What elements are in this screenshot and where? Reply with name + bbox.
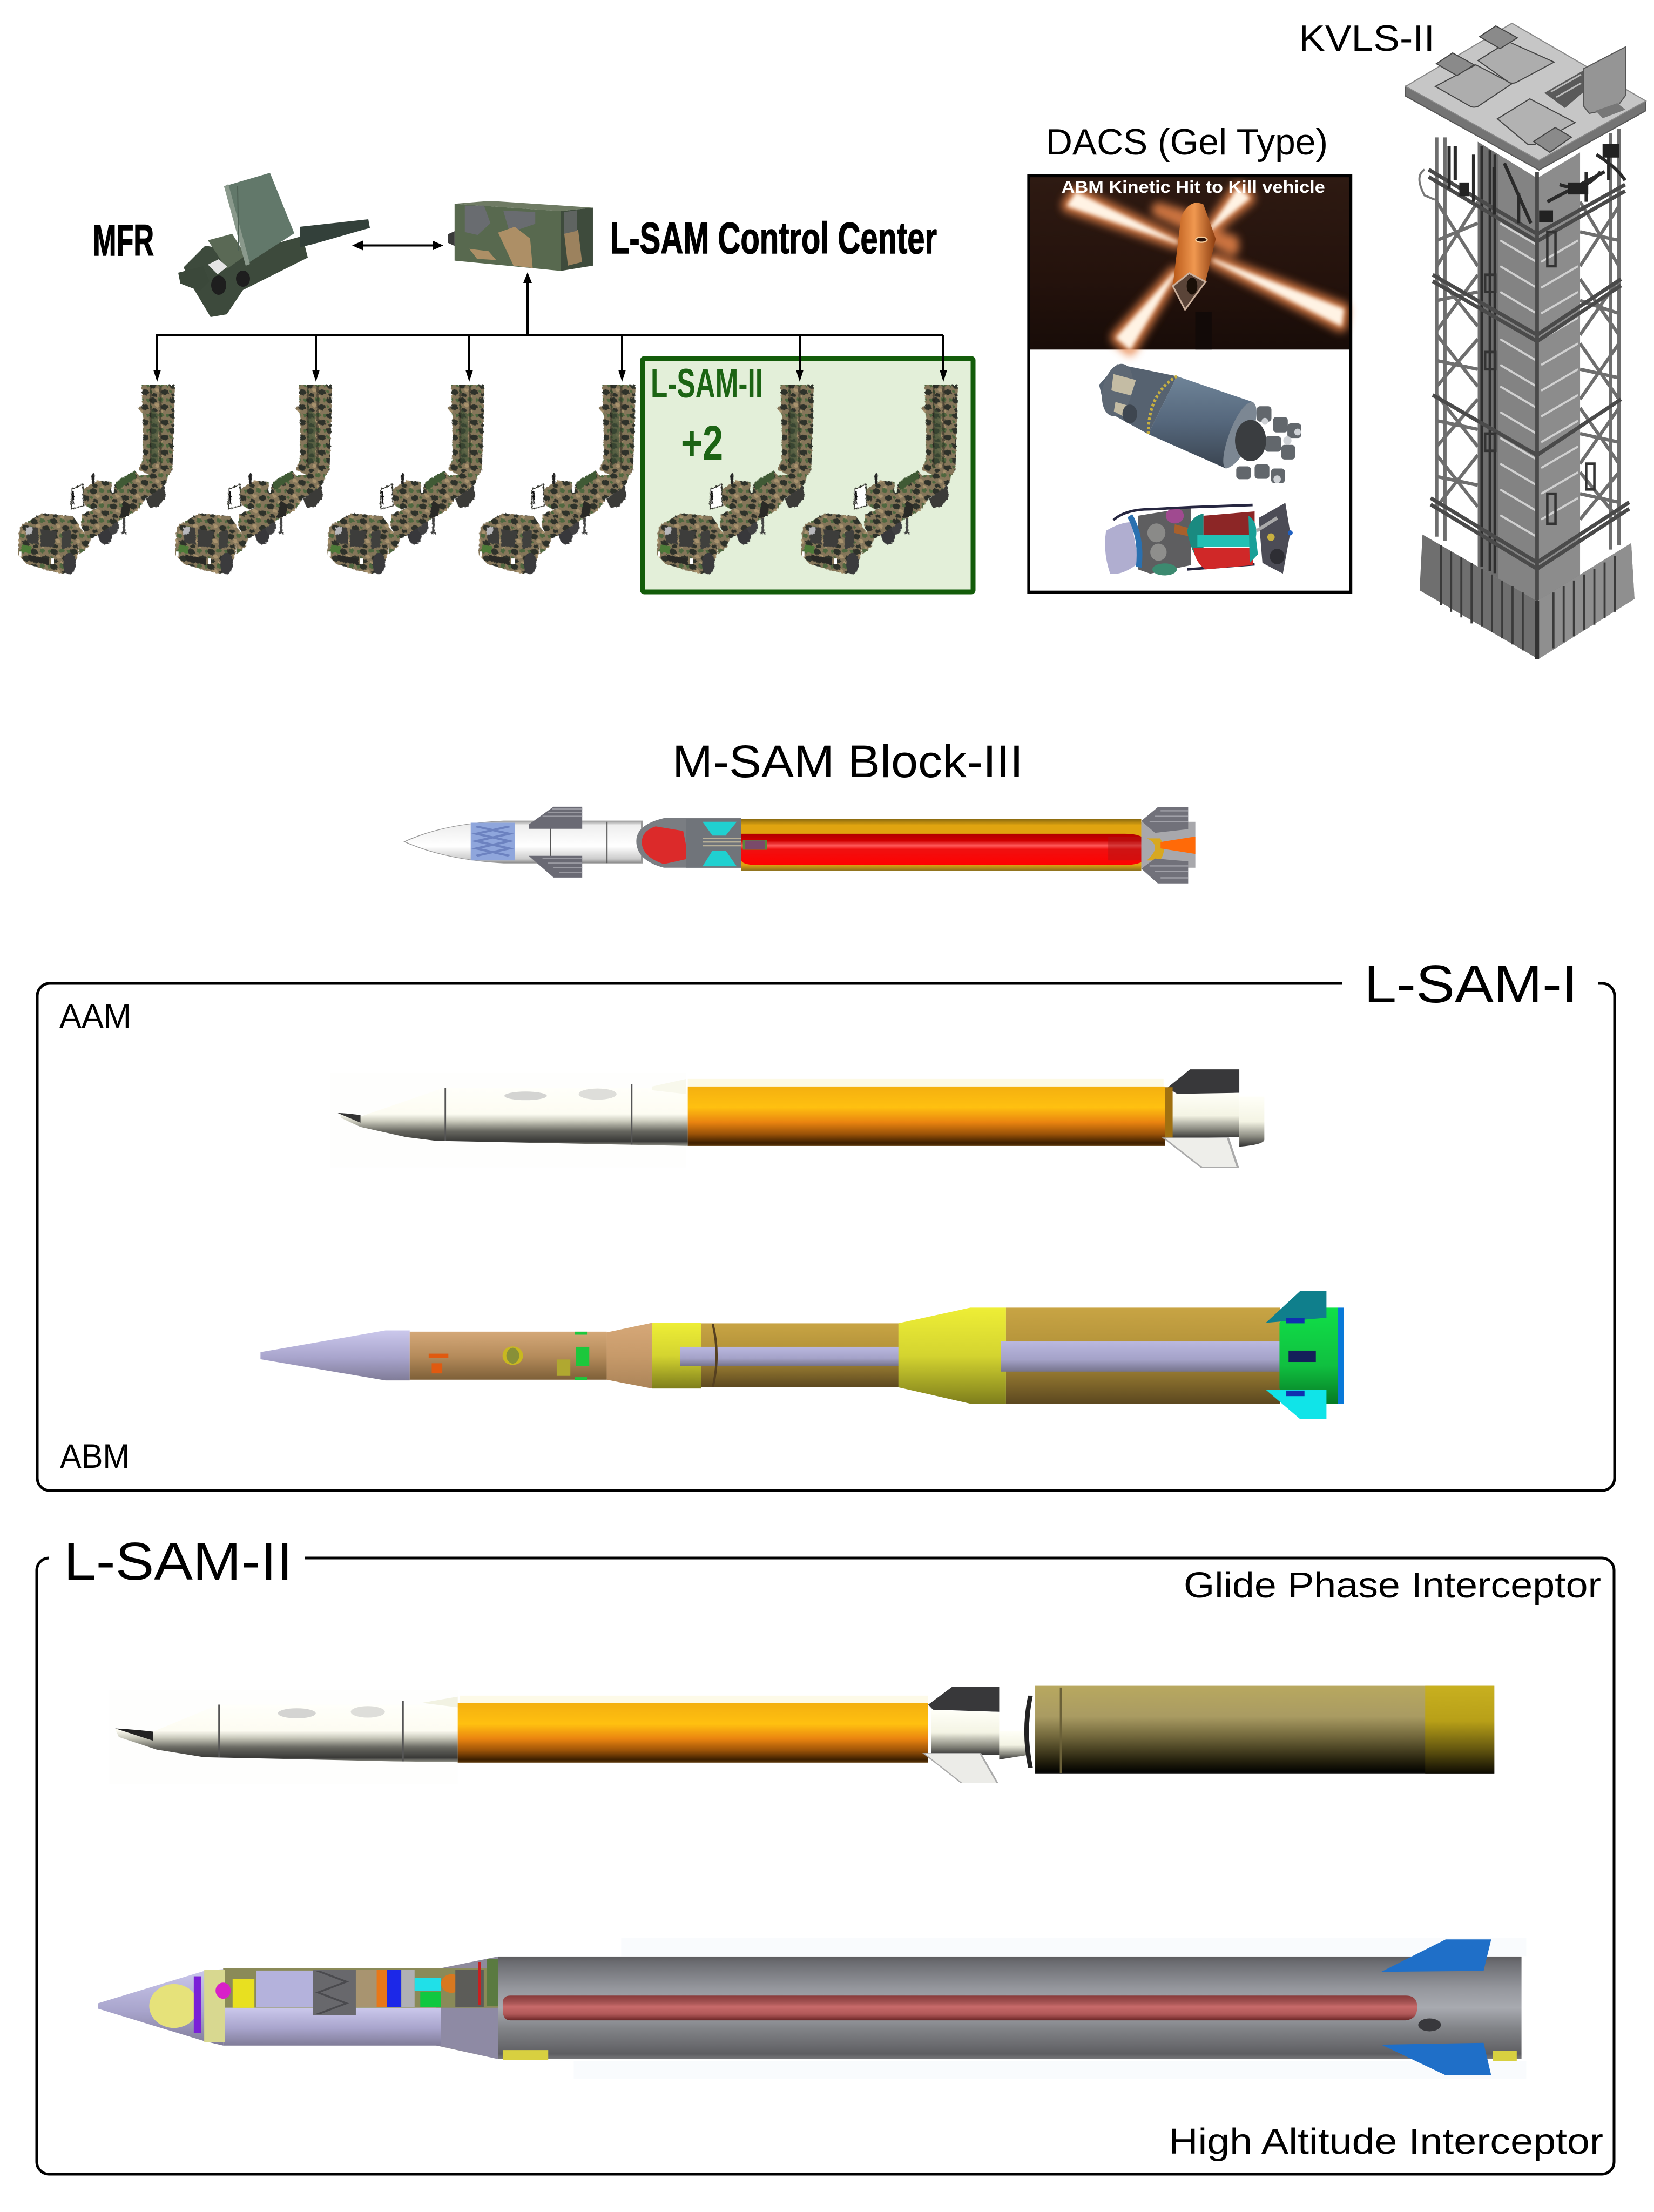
heading: L-SAM-II: L-SAM-II (64, 1532, 293, 1591)
missile: L-SAM-I ABM (260, 1291, 1344, 1419)
label: +2: +2 (681, 416, 723, 470)
arrows: control center to launchers (153, 272, 947, 382)
photo: kinetic kill vehicle firing (1029, 176, 1351, 349)
missile: High Altitude Interceptor (98, 1938, 1526, 2079)
launcher 6 (L-SAM-II) (801, 385, 958, 574)
heading: M-SAM Block-III: M-SAM Block-III (672, 736, 1023, 787)
MFR label: MFR (93, 216, 154, 265)
panel: L-SAM-II frame (37, 1558, 1614, 2174)
label: L-SAM-II: L-SAM-II (651, 361, 763, 407)
panel: L-SAM-I frame (37, 983, 1615, 1491)
launcher 4 (478, 385, 636, 574)
label: Glide Phase Interceptor: Glide Phase Interceptor (1184, 1565, 1601, 1606)
arrow: MFR to control center (352, 241, 443, 251)
missile: M-SAM Block-III cutaway (404, 807, 1196, 884)
icon: KVLS-II launcher tower (1406, 23, 1646, 659)
tower top plate (1406, 23, 1646, 170)
icon: L-SAM control center shelter (448, 201, 593, 271)
launcher 3 (327, 385, 484, 574)
panel: L-SAM-II green highlight (643, 359, 973, 592)
tower bracing (1437, 129, 1619, 550)
label: L-SAM Control Center: L-SAM Control Center (610, 214, 937, 263)
icon: MFR radar vehicle (178, 173, 370, 317)
heading: DACS: DACS (Gel Type) (1046, 122, 1328, 163)
launcher 2 (175, 385, 332, 574)
DACS frame border (1029, 176, 1351, 592)
label: ABM: ABM (60, 1438, 130, 1475)
label: High Altitude Interceptor: High Altitude Interceptor (1169, 2121, 1603, 2162)
tower base (1420, 535, 1635, 659)
panel: DACS images (1029, 176, 1351, 592)
heading: KVLS-II: KVLS-II (1299, 18, 1435, 59)
icon: DACS external render (1097, 360, 1301, 483)
launcher 1 (18, 385, 175, 574)
missile: Glide Phase Interceptor (110, 1686, 1494, 1784)
heading: L-SAM-I: L-SAM-I (1364, 954, 1578, 1014)
label: AAM: AAM (59, 997, 131, 1035)
missile: L-SAM-I AAM (330, 1069, 1264, 1168)
caption: ABM Kinetic Hit to Kill vehicle: ABM Kinetic Hit to Kill vehicle (1062, 177, 1325, 197)
launcher 5 (L-SAM-II) (657, 385, 814, 574)
tower core (1478, 141, 1537, 601)
icon: DACS cutaway render (1105, 503, 1293, 575)
